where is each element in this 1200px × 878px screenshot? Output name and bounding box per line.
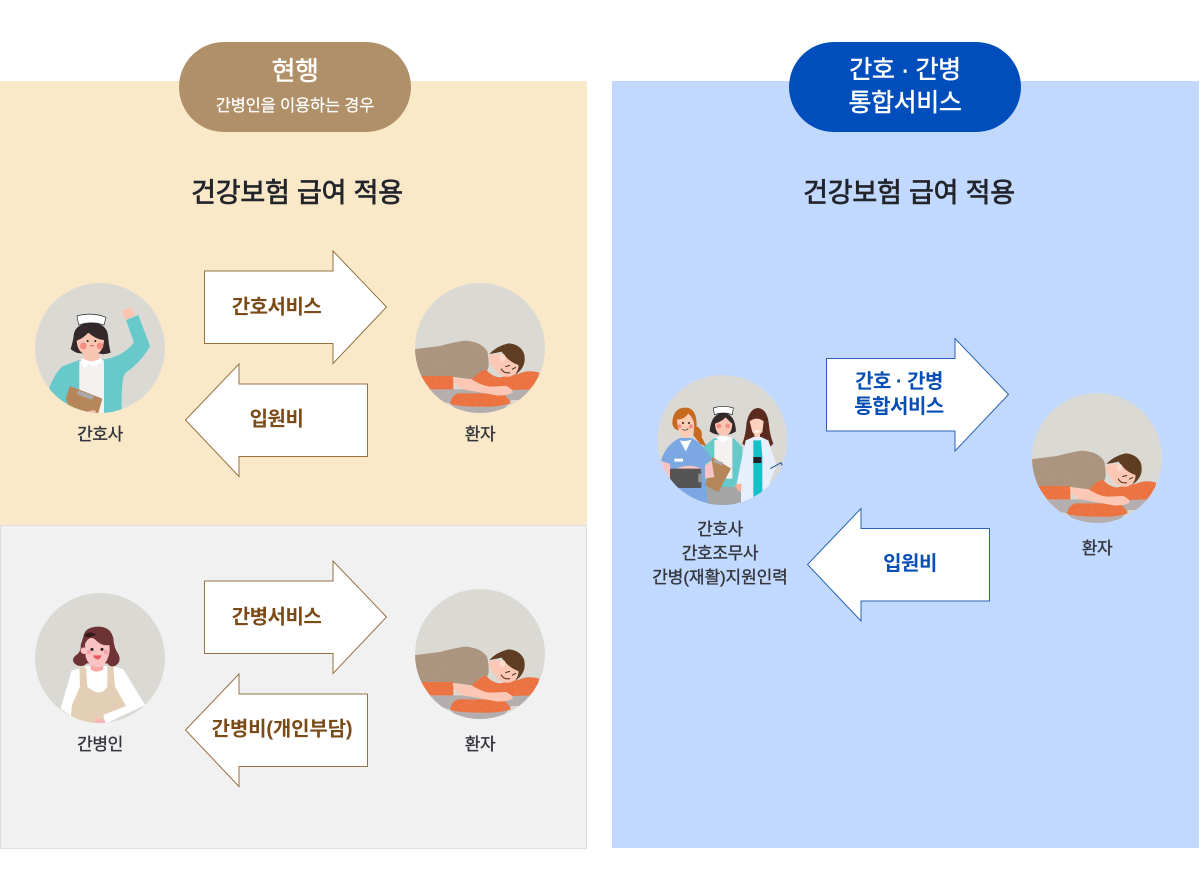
panel: integrated service (612, 81, 1199, 848)
heading: left insurance coverage: 건강보험 급여 적용 (191, 178, 403, 208)
arrow: caregiving fee, out of pocket: 간병비(개인부담) (212, 718, 352, 740)
figure: nurse (35, 283, 165, 417)
badge: integrated service: 통합서비스 (848, 89, 962, 117)
figure: patient, top row (413, 283, 545, 413)
label: caregiver: 간병인 (77, 735, 123, 754)
arrow: nursing service (204, 251, 386, 364)
arrow: caregiving fee, out of pocket (186, 674, 368, 786)
figure: patient, bottom row (413, 589, 545, 719)
badge: integrated service (789, 42, 1021, 132)
arrow: hospital fee, integrated service (808, 508, 990, 621)
arrow: integrated nursing and care service (826, 338, 1008, 451)
badge: current system: 간병인을 이용하는 경우 (216, 96, 374, 115)
badge: integrated service: 간호 · 간병 (849, 56, 961, 84)
label: care team members: 간호조무사 (682, 544, 759, 563)
arrow: caregiving service (204, 561, 386, 674)
arrow: integrated nursing and care service: 간호 · 간병 (855, 370, 943, 393)
arrow: hospital fee (186, 364, 368, 476)
label: care team members (652, 520, 788, 587)
badge: current system: 현행 (272, 56, 318, 86)
figure: care team (657, 375, 787, 509)
label: patient, top row: 환자 (465, 425, 496, 444)
figure: patient, integrated service (1030, 393, 1162, 523)
arrow: integrated nursing and care service: 통합서비스 (854, 395, 944, 418)
label: care team members: 간병(재활)지원인력 (652, 568, 788, 587)
heading: right insurance coverage: 건강보험 급여 적용 (803, 178, 1015, 208)
label: care team members: 간호사 (697, 520, 744, 539)
badge: current system (179, 42, 411, 132)
figure: caregiver (35, 593, 165, 727)
arrow: caregiving service: 간병서비스 (232, 606, 321, 628)
panel: current system, insured care (0, 81, 587, 525)
label: patient, bottom row: 환자 (465, 735, 496, 754)
arrow: hospital fee: 입원비 (250, 408, 303, 430)
arrow: nursing service: 간호서비스 (232, 296, 321, 318)
label: nurse: 간호사 (77, 425, 124, 444)
panel: current system, private caregiver (0, 526, 586, 848)
arrow: hospital fee, integrated service: 입원비 (883, 552, 937, 575)
label: patient, integrated service: 환자 (1082, 539, 1113, 558)
